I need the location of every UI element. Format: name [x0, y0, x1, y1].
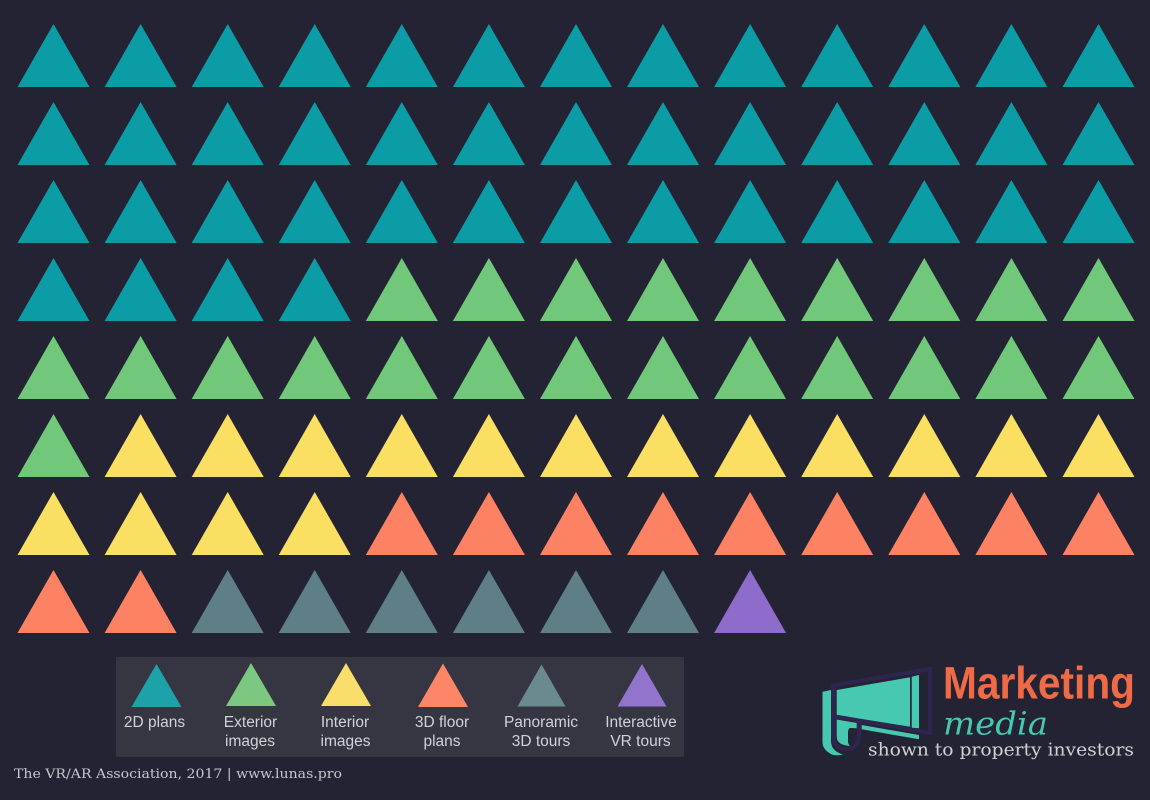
- legend item: Exterior images: Exterior: [224, 714, 277, 731]
- triangles: 3D floor plans: [18, 492, 1134, 633]
- legend item: Interior images: Interior: [321, 714, 369, 731]
- legend item: Panoramic 3D tours: [504, 664, 578, 750]
- legend item: 2D plans: [124, 664, 185, 731]
- legend item: 2D plans: 2D plans: [124, 714, 185, 731]
- legend item: Exterior images: images: [225, 733, 275, 750]
- triangles: Interior images: [18, 414, 1134, 555]
- legend item: Interior images: [321, 663, 371, 750]
- legend item: Interactive VR tours: VR tours: [610, 733, 671, 750]
- triangles: Panoramic 3D tours: [192, 570, 699, 633]
- icon: megaphone: [822, 669, 930, 755]
- legend item: Panoramic 3D tours: Panoramic: [504, 714, 578, 731]
- subtitle: shown to property investors: [868, 740, 1134, 760]
- legend item: Interior images: images: [321, 733, 371, 750]
- legend item: Interactive VR tours: [605, 664, 677, 750]
- legend item: Exterior images: [224, 663, 277, 750]
- legend item: 3D floor plans: plans: [423, 733, 461, 750]
- title: Marketing: Marketing: [943, 658, 1135, 708]
- legend item: 3D floor plans: 3D floor: [415, 714, 469, 731]
- triangle: Interactive VR tours: [714, 570, 786, 633]
- legend item: Interactive VR tours: Interactive: [605, 714, 677, 731]
- legend panel: [116, 657, 684, 757]
- triangles: 2D plans: [18, 24, 1134, 321]
- source line: The VR/AR Association, 2017 | www.lunas.pro: [14, 767, 342, 782]
- legend item: 3D floor plans: [415, 664, 469, 750]
- title: media: media: [943, 704, 1048, 742]
- triangles: Exterior images: [18, 258, 1134, 477]
- legend item: Panoramic 3D tours: 3D tours: [512, 733, 571, 750]
